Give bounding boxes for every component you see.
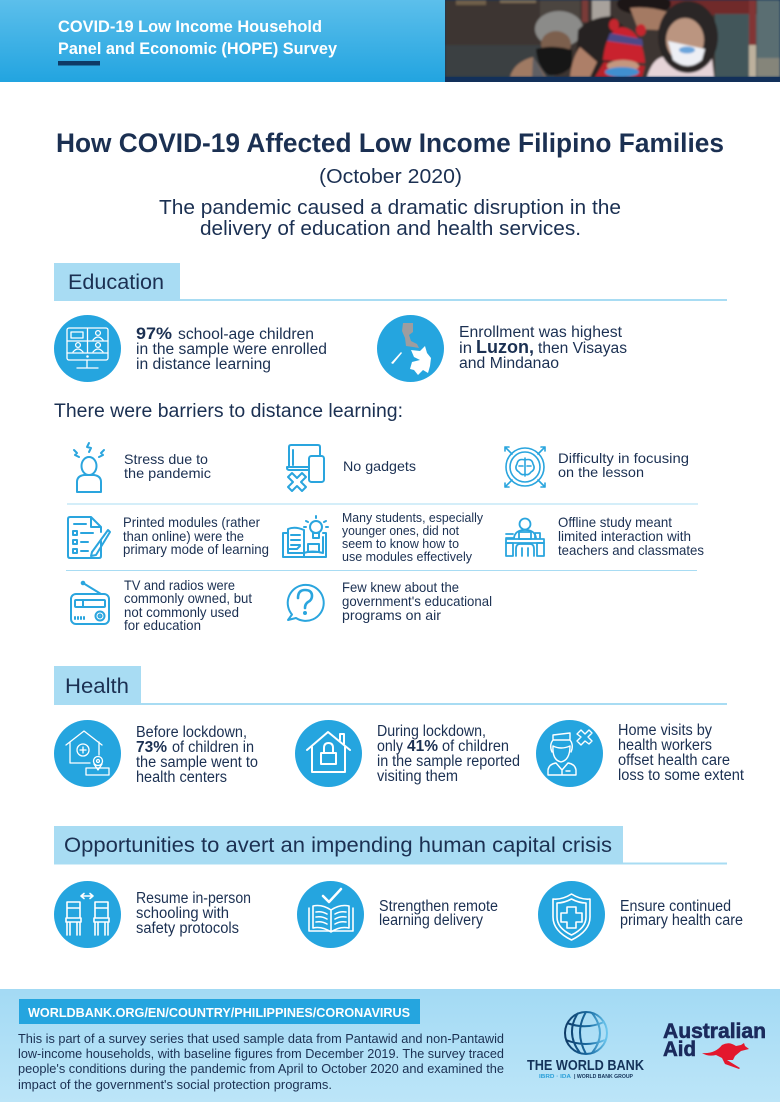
barrier: offline study [506,514,704,558]
barrier: educational programs on air: Few knew about the [342,579,459,595]
barrier: difficulty focusing: Difficulty in focusing [558,450,689,466]
text: primary health care: primary health care [620,912,743,929]
logo: Australian Aid: Australian [663,1020,766,1043]
barrier: no gadgets: No gadgets [343,458,416,474]
icon: radio [71,582,109,624]
text: before lockdown 73%: of children in [172,739,254,756]
summary statement: delivery of education and health services. [200,218,581,240]
barrier: printed modules: primary mode of learning [123,541,269,557]
barrier: printed modules [68,514,269,558]
barrier: printed modules: than online) were the [123,528,244,544]
icon: question speech bubble [288,585,324,621]
text: during lockdown 41%: only [377,738,403,755]
text: 97% enrolled [136,324,327,373]
text: primary health care [620,898,743,929]
survey description: people's conditions during the pandemic from April to October 2020 and examined the [18,1062,504,1076]
icon: online class monitor [54,315,121,382]
icon: open book with light bulb [283,516,328,557]
barrier: using modules: Many students, especially [342,510,483,525]
text: enrollment by region: then Visayas [538,340,627,357]
section heading: Opportunities [54,826,727,864]
row divider [67,504,698,505]
text: home visits: Home visits by [618,722,712,739]
text: enrollment by region: Enrollment was highest [459,324,623,341]
icon: health worker with cross [536,720,603,787]
date subtitle: (October 2020) [319,166,462,188]
icon: red kangaroo [702,1043,749,1069]
barrier: TV and radios: for education [124,617,201,633]
barrier: printed modules: Printed modules (rather [123,514,260,530]
text: 97% enrolled: 97% [136,324,172,343]
barrier: offline study: limited interaction with [558,528,691,544]
text: enrollment by region: Luzon, [476,337,534,357]
section heading: Opportunities: Opportunities to avert an impending human capital crisis [64,834,612,857]
text: enrollment by region: in [459,340,472,357]
barrier: stress: the pandemic [124,465,211,481]
header title: COVID-19 Low Income Household [58,17,322,36]
section heading: Health: Health [65,675,129,698]
text: resume in-person [136,890,251,937]
barrier: TV and radios: commonly owned, but [124,590,252,606]
icon: stressed person [74,443,104,492]
barrier: using modules: use modules effectively [342,549,472,564]
text: during lockdown 41%: 41% [407,738,438,755]
barrier: TV and radios: TV and radios were [124,577,235,593]
header photo: family wearing masks [445,0,780,82]
text: strengthen remote learning: learning delivery [379,912,483,929]
icon: open book with check [297,881,364,948]
grandmother [510,57,546,77]
text: 97% enrolled: in distance learning [136,356,271,373]
text: enrollment by region: and Mindanao [459,355,559,372]
survey description [18,1032,504,1092]
barrier: offline study: teachers and classmates [558,542,704,558]
text: during lockdown 41%: visiting them [377,768,458,785]
barrier: difficulty focusing: on the lesson [558,464,644,480]
icon: spaced chairs [54,881,121,948]
header title: Panel and Economic (HOPE) Survey [58,39,338,58]
main title: How COVID-19 Affected Low Income Filipino Families [56,128,724,158]
barrier: offline study: Offline study meant [558,514,672,530]
text: primary health care: Ensure continued [620,898,731,915]
text: before lockdown 73%: 73% [136,739,167,756]
website link box [19,999,420,1024]
barrier: educational programs on air [288,579,492,623]
logo: Australian Aid: Aid [663,1038,696,1061]
barrier: difficulty focusing [505,447,689,487]
section heading: Health [54,666,727,705]
logo: The World Bank: THE WORLD BANK [527,1058,644,1074]
text: home visits: loss to some extent [618,767,745,784]
row divider [66,570,697,571]
text: 97% enrolled: school-age children [178,326,314,343]
icon: student at desk [506,518,544,556]
text: home visits [618,722,745,784]
icon: house with padlock [295,720,362,787]
text: 97% enrolled: in the sample were enrolled [136,341,327,358]
text: resume in-person: schooling with [136,905,229,922]
icon: shield with medical cross [538,881,605,948]
mother [576,15,623,77]
text: before lockdown 73% [136,724,258,786]
section heading: Education: Education [68,271,164,294]
icon: house with medical cross and pin [54,720,121,787]
summary statement [159,197,621,240]
text: strengthen remote learning [379,898,498,929]
barriers heading: There were barriers to distance learning: [54,401,403,422]
barrier: stress [74,443,211,492]
section heading: Education [54,263,727,301]
text: during lockdown 41%: of children [442,738,509,755]
text: home visits: health workers [618,737,712,754]
header banner [0,0,780,82]
barrier: educational programs on air: government's educational [342,593,492,609]
logo: The World Bank: IBRD · IDA [539,1074,571,1080]
logo: Australian Aid [663,1020,766,1069]
Luzon highlighted in grey [402,323,419,348]
barrier: no gadgets [287,445,416,491]
text: during lockdown 41%: in the sample reported [377,753,520,770]
summary statement: The pandemic caused a dramatic disruption in the [159,197,621,219]
survey description: impact of the government's social protection programs. [18,1078,332,1092]
header title [58,17,338,58]
text: before lockdown 73%: the sample went to [136,754,258,771]
website link box: WORLDBANK.ORG/EN/COUNTRY/PHILIPPINES/CORONAVIRUS [28,1005,410,1020]
text: during lockdown 41%: During lockdown, [377,723,486,740]
text: enrollment by region [459,324,627,372]
icon: Philippines map [377,315,444,382]
barrier: TV and radios [71,577,252,633]
barrier: using modules: younger ones, did not [342,523,459,538]
text: during lockdown 41% [377,723,520,785]
icon: checklist and pencil [68,517,110,558]
girl [647,57,714,77]
survey description: This is part of a survey series that used sample data from Pantawid and non-Pantawid [18,1032,504,1046]
icon: brain target [505,447,545,487]
barrier: educational programs on air: programs on air [342,607,441,623]
text: resume in-person: Resume in-person [136,890,251,907]
logo: The World Bank [527,1012,644,1080]
survey description: low-income households, with baseline figures from December 2019. The survey traced [18,1047,504,1061]
barrier: using modules: seem to know how to [342,536,459,551]
barrier: using modules [283,510,483,564]
logo: The World Bank: | WORLD BANK GROUP [574,1074,633,1080]
barrier: TV and radios: not commonly used [124,604,239,620]
text: home visits: offset health care [618,752,730,769]
text: before lockdown 73%: health centers [136,769,227,786]
footer panel [0,989,780,1102]
baby [609,19,619,31]
text: resume in-person: safety protocols [136,920,239,937]
icon: laptop, phone and cross [287,445,324,491]
text: strengthen remote learning: Strengthen remote [379,898,498,915]
barrier: stress: Stress due to [124,451,208,467]
text: before lockdown 73%: Before lockdown, [136,724,247,741]
header accent bar [58,61,100,66]
